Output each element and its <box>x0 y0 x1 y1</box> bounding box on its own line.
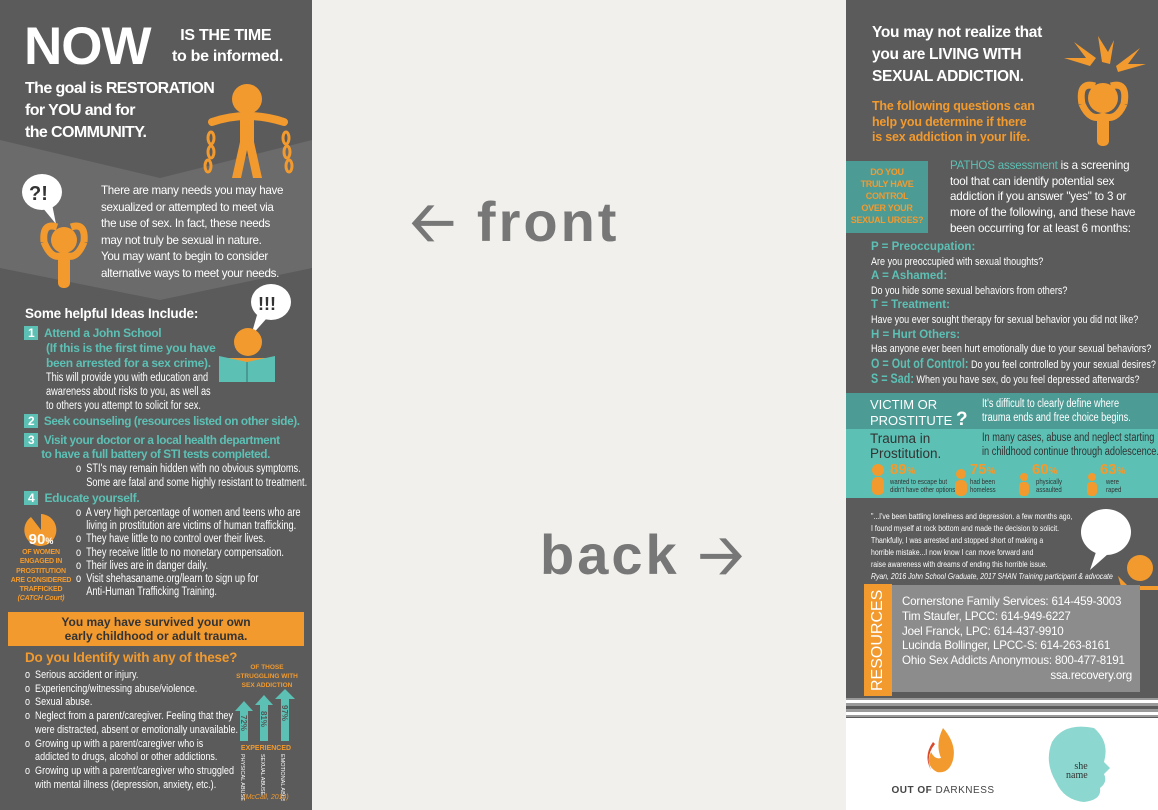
heading: sexual addiction <box>872 24 1042 85</box>
goal text: The goal is RESTORATION <box>25 80 214 97</box>
list: ideas: 1 Attend a John School <box>28 326 161 340</box>
list: PATHOS: Are you preoccupied with sexual thoughts? <box>871 256 1043 268</box>
stats: 60% <box>1032 461 1058 478</box>
subtitle: to be informed. <box>172 48 283 65</box>
chart: arrows 72/81/97 <box>235 664 298 801</box>
stats: were <box>1106 477 1119 486</box>
list: ideas: o A very high percentage of women and teens who are <box>76 507 301 519</box>
chart: arrows 72/81/97: 97% <box>280 705 289 721</box>
list: ideas: o Their lives are in danger daily. <box>76 560 208 572</box>
stat: 90%: ENGAGED IN <box>20 558 62 565</box>
band: victim or prostitute <box>846 393 1158 429</box>
box: resources <box>864 585 1140 692</box>
logo: she has a name: name <box>1066 770 1088 781</box>
quote: I found myself at rock bottom and made the decision to solicit. <box>871 523 1059 533</box>
list: ideas: o STI's may remain hidden with no obvious symptoms. <box>76 463 301 475</box>
band: victim or prostitute: VICTIM OR <box>870 397 937 412</box>
banner: trauma: You may have survived your own <box>61 615 251 629</box>
icon: reading figure <box>219 284 291 382</box>
stats <box>872 461 1126 496</box>
list: ideas: living in prostitution are victims of human trafficking. <box>86 520 296 532</box>
list: PATHOS: Has anyone ever been hurt emotionally due to your sexual behaviors? <box>871 343 1151 355</box>
band: trauma stats: In many cases, abuse and neglect starting <box>982 432 1154 444</box>
band: victim or prostitute: trauma ends and free choice begins. <box>982 412 1131 424</box>
list: PATHOS: O = Out of Control: Do you feel controlled by your sexual desires? <box>871 356 1156 371</box>
text: pathos: tool that can identify potential sex <box>950 175 1114 188</box>
list: ideas: Anti-Human Trafficking Training. <box>86 586 217 598</box>
icon: confused figure with speech bubble <box>22 174 88 288</box>
goal text: the COMMUNITY. <box>25 124 146 141</box>
callout: control: DO YOU <box>870 167 904 177</box>
box: resources: Cornerstone Family Services: 614-459-3003 <box>902 595 1121 608</box>
goal text <box>25 80 214 141</box>
box: resources: Joel Franck, LPC: 614-437-9910 <box>902 625 1064 638</box>
chart: arrows 72/81/97: 72% <box>239 715 248 731</box>
heading: sexual addiction: you are LIVING WITH <box>872 46 1021 63</box>
stats: homeless <box>970 484 996 494</box>
list: PATHOS: P = Preoccupation: <box>871 241 975 253</box>
list: ideas: Some are fatal and some highly resistant to treatment. <box>86 476 307 488</box>
box: resources: Ohio Sex Addicts Anonymous: 800-477-8191 <box>902 654 1125 667</box>
list: ideas: awareness about risks to you, as well as <box>46 386 211 398</box>
list: ideas: to others you attempt to solicit for sex. <box>46 400 201 412</box>
goal text: for YOU and for <box>25 102 135 119</box>
stat: 90%: (CATCH Court) <box>18 595 64 602</box>
text: following questions: is sex addiction in your life. <box>872 130 1030 144</box>
text: following questions: The following questions can <box>872 99 1035 113</box>
list: experiences: addicted to drugs, alcohol or other addictions. <box>35 751 217 763</box>
quote <box>871 511 1113 581</box>
band: trauma stats: Prostitution. <box>870 446 941 461</box>
list: experiences: o Growing up with a parent/caregiver who is <box>25 738 203 750</box>
quote: horrible mistake...I now know I can move forward and <box>871 547 1033 557</box>
list: ideas: 3 Visit your doctor or a local health department <box>28 433 280 447</box>
icon: speaking figure <box>1081 509 1158 590</box>
quote: raise awareness with dreams of ending this horrible issue. <box>871 559 1048 569</box>
tab: resources: RESOURCES <box>869 589 886 691</box>
list: experiences <box>25 669 238 791</box>
icon: stressed head <box>1064 36 1146 146</box>
chart: arrows 72/81/97: EXPERIENCED <box>241 745 291 752</box>
text: pathos: been occurring for at least 6 months: <box>950 222 1131 235</box>
icon: figure with broken chains <box>204 84 294 178</box>
stat: 90%: ARE CONSIDERED <box>11 577 71 584</box>
list: PATHOS: A = Ashamed: <box>871 270 947 282</box>
logo: she has a name <box>1048 726 1110 802</box>
list: ideas: 4 Educate yourself. <box>28 491 139 505</box>
panel: front <box>0 0 312 810</box>
list: experiences: o Neglect from a parent/caregiver. Feeling that they <box>25 710 233 722</box>
callout: control: OVER YOUR <box>861 203 913 213</box>
text: pathos: addiction if you answer "yes" to 3 or <box>950 190 1126 203</box>
quote: Ryan, 2016 John School Graduate, 2017 SHAN Training participant & advocate <box>871 571 1113 581</box>
heading: sexual addiction: You may not realize that <box>872 24 1042 41</box>
icon: confused figure with speech bubble: ?! <box>29 183 48 205</box>
stats: had been <box>970 477 995 486</box>
callout: control <box>846 161 928 233</box>
label: front arrow: 🡠 front <box>410 190 619 253</box>
footer logos <box>846 718 1158 810</box>
stats: raped <box>1106 484 1121 494</box>
box: resources: ssa.recovery.org <box>1050 669 1132 682</box>
tab: resources <box>864 584 892 696</box>
heading: identify: Do you Identify with any of these? <box>25 650 237 665</box>
list: experiences: with mental illness (depression, anxiety, etc.). <box>35 779 216 791</box>
list: ideas: been arrested for a sex crime). <box>46 356 211 370</box>
text: following questions <box>872 99 1035 144</box>
stat: 90% <box>11 514 72 602</box>
list: PATHOS: Have you ever sought therapy for sexual behavior you did not like? <box>871 314 1138 326</box>
logo: she has a name: she <box>1074 761 1088 772</box>
chart: arrows 72/81/97: PHYSICAL ABUSE <box>239 754 245 801</box>
stat: 90%: OF WOMEN <box>22 549 60 556</box>
callout: control: CONTROL <box>866 191 908 201</box>
list: PATHOS: H = Hurt Others: <box>871 329 960 341</box>
list: experiences: o Sexual abuse. <box>25 696 92 708</box>
stats: wanted to escape but <box>890 477 947 486</box>
list: ideas: (If this is the first time you have <box>46 341 216 355</box>
text: needs <box>101 184 283 280</box>
band: trauma stats <box>846 429 1158 498</box>
chart: arrows 72/81/97: SEXUAL ABUSE <box>259 754 265 796</box>
list: PATHOS <box>871 241 1156 386</box>
stats: physically <box>1036 477 1062 486</box>
band: victim or prostitute: PROSTITUTE ? <box>870 409 968 430</box>
chart: arrows 72/81/97: 81% <box>259 711 268 727</box>
text: pathos <box>950 159 1135 235</box>
text: needs: sexualized or attempted to meet via <box>101 200 274 214</box>
quote: Thankfully, I was arrested and stopped short of making a <box>871 535 1043 545</box>
icon: reading figure: !!! <box>258 294 276 314</box>
list: experiences: were distracted, absent or emotionally unavailable. <box>35 724 238 736</box>
list: PATHOS: Do you hide some sexual behaviors from others? <box>871 285 1067 297</box>
subtitle <box>172 27 283 65</box>
band: victim or prostitute: It's difficult to clearly define where <box>982 398 1119 410</box>
callout: control: SEXUAL URGES? <box>851 215 923 225</box>
logo: out of darkness <box>891 728 995 796</box>
stat: 90%: 90% <box>29 531 53 548</box>
list: PATHOS: T = Treatment: <box>871 299 950 311</box>
banner: trauma <box>8 612 304 646</box>
list: experiences: o Serious accident or injury. <box>25 669 138 681</box>
list: ideas: o They have little to no control over their lives. <box>76 533 266 545</box>
list: ideas: This will provide you with education and <box>46 372 208 384</box>
text: needs: alternative ways to meet your needs. <box>101 266 279 280</box>
list: ideas: o They receive little to no monetary compensation. <box>76 547 284 559</box>
stats: 75% <box>970 461 996 478</box>
list: PATHOS: S = Sad: When you have sex, do you feel depressed afterwards? <box>871 371 1140 386</box>
chart: arrows 72/81/97: OF THOSE STRUGGLING WITH SEX ADDICTION <box>236 664 298 689</box>
list: ideas: o Visit shehasaname.org/learn to sign up for <box>76 573 258 585</box>
text: needs: may not truly be sexual in nature. <box>101 234 262 246</box>
chart: arrows 72/81/97: (McCall, 2014) <box>243 794 289 801</box>
text: pathos: PATHOS assessment is a screening <box>950 159 1129 172</box>
stats: 63% <box>1100 461 1126 478</box>
heading: helpful ideas: Some helpful Ideas Include: <box>25 306 198 321</box>
heading: sexual addiction: SEXUAL ADDICTION. <box>872 68 1024 85</box>
label: back arrow: back 🡢 <box>540 523 747 586</box>
callout: control: TRULY HAVE <box>861 179 913 189</box>
text: needs: the use of sex. In fact, these needs <box>101 217 270 230</box>
text: pathos: more of the following, and these have <box>950 206 1135 219</box>
stats: assaulted <box>1036 484 1062 494</box>
quote: "...I've been battling loneliness and depression. a few months ago, <box>871 511 1072 521</box>
logo: out of darkness: OUT OF DARKNESS <box>891 785 995 796</box>
list: experiences: o Experiencing/witnessing abuse/violence. <box>25 683 197 695</box>
band: trauma stats: in childhood continue through adolescence. <box>982 446 1158 458</box>
text: needs: There are many needs you may have <box>101 184 283 197</box>
stat: 90%: PROSTITUTION <box>16 568 66 575</box>
panel: back <box>846 0 1158 810</box>
title: NOW <box>24 17 151 76</box>
stat: 90%: TRAFFICKED <box>20 586 62 593</box>
subtitle: IS THE TIME <box>180 27 271 44</box>
box: resources: Tim Staufer, LPCC: 614-949-6227 <box>902 610 1071 623</box>
box: resources: Lucinda Bollinger, LPCC-S: 614-263-8161 <box>902 639 1110 652</box>
banner: trauma: early childhood or adult trauma. <box>65 629 247 643</box>
stats: 89% <box>890 461 916 478</box>
list: ideas: to have a full battery of STI tests completed. <box>41 447 270 461</box>
list: ideas <box>24 326 307 598</box>
text: needs: You may want to begin to consider <box>101 250 268 263</box>
band: trauma stats: Trauma in <box>870 431 930 446</box>
list: ideas: 2 Seek counseling (resources listed on other side). <box>28 414 300 428</box>
text: following questions: help you determine if there <box>872 114 1026 128</box>
list: experiences: o Growing up with a parent/caregiver who struggled <box>25 765 234 777</box>
stats: didn't have other options <box>890 484 955 494</box>
